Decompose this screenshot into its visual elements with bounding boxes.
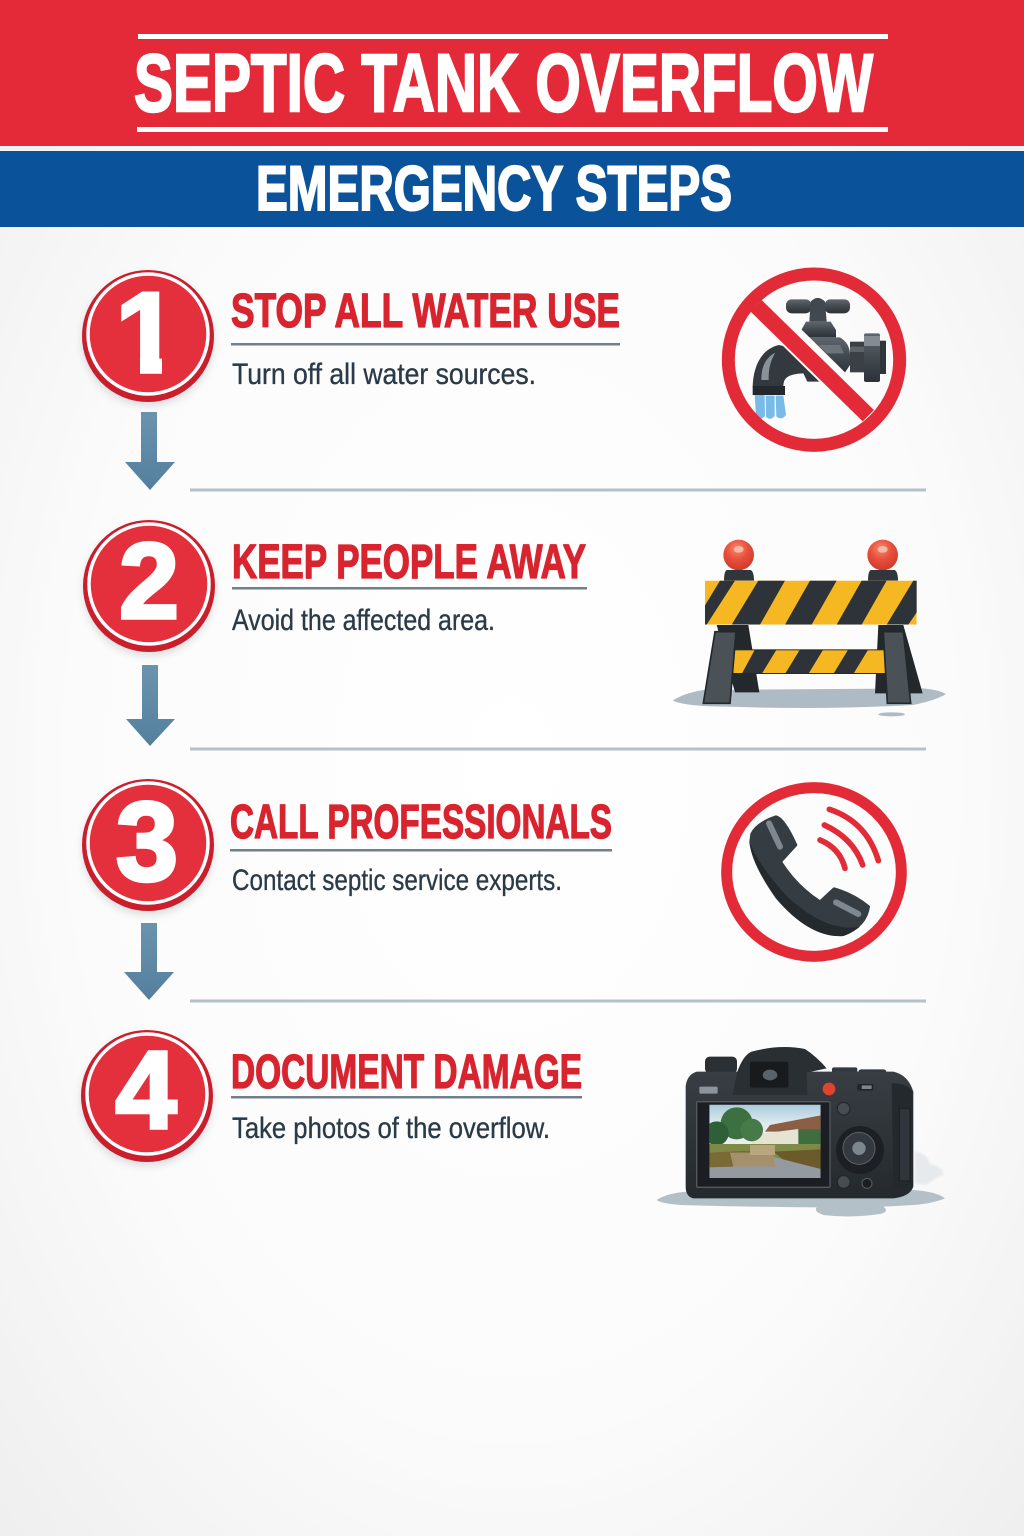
title banner — [0, 0, 1024, 146]
step 1 panel — [82, 270, 900, 490]
description 2: Avoid the affected area. — [232, 604, 495, 637]
number badge 3: 3 — [116, 779, 178, 904]
subtitle text: EMERGENCY STEPS — [256, 154, 732, 224]
description 3: Contact septic service experts. — [232, 864, 562, 897]
icon: camera — [657, 1047, 945, 1216]
number badge 4: 4 — [115, 1029, 177, 1152]
heading: keep people away: KEEP PEOPLE AWAY — [232, 536, 586, 589]
icon: no water faucet — [728, 274, 900, 445]
subtitle banner — [0, 151, 1024, 227]
description 1: Turn off all water sources. — [232, 358, 536, 391]
arrow 3 — [124, 923, 174, 1000]
heading underline 2 — [232, 587, 587, 590]
icon: road barrier — [673, 540, 946, 716]
arrow 1 — [125, 412, 175, 490]
step 3 panel — [82, 779, 901, 1000]
heading underline 3 — [230, 849, 612, 852]
number badge 2: 2 — [119, 520, 179, 641]
divider 1 — [190, 488, 926, 492]
heading: stop all water use: STOP ALL WATER USE — [231, 285, 620, 338]
divider 3 — [190, 1000, 926, 1002]
heading: call professionals: CALL PROFESSIONALS — [230, 796, 612, 849]
description 4: Take photos of the overflow. — [232, 1112, 550, 1145]
number badge 4 — [81, 1029, 213, 1166]
heading: document damage: DOCUMENT DAMAGE — [231, 1046, 582, 1099]
step 2 panel — [83, 520, 946, 746]
number badge 2 — [83, 520, 215, 656]
arrow 2 — [126, 665, 175, 746]
number badge 1 — [82, 270, 214, 406]
number badge 3 — [82, 779, 214, 915]
number badge 1: 1 — [115, 270, 179, 397]
step 4 panel — [81, 1029, 945, 1216]
heading underline 1 — [231, 343, 620, 346]
heading underline 4 — [231, 1096, 582, 1098]
icon: phone call — [727, 788, 901, 956]
divider 2 — [190, 748, 926, 750]
